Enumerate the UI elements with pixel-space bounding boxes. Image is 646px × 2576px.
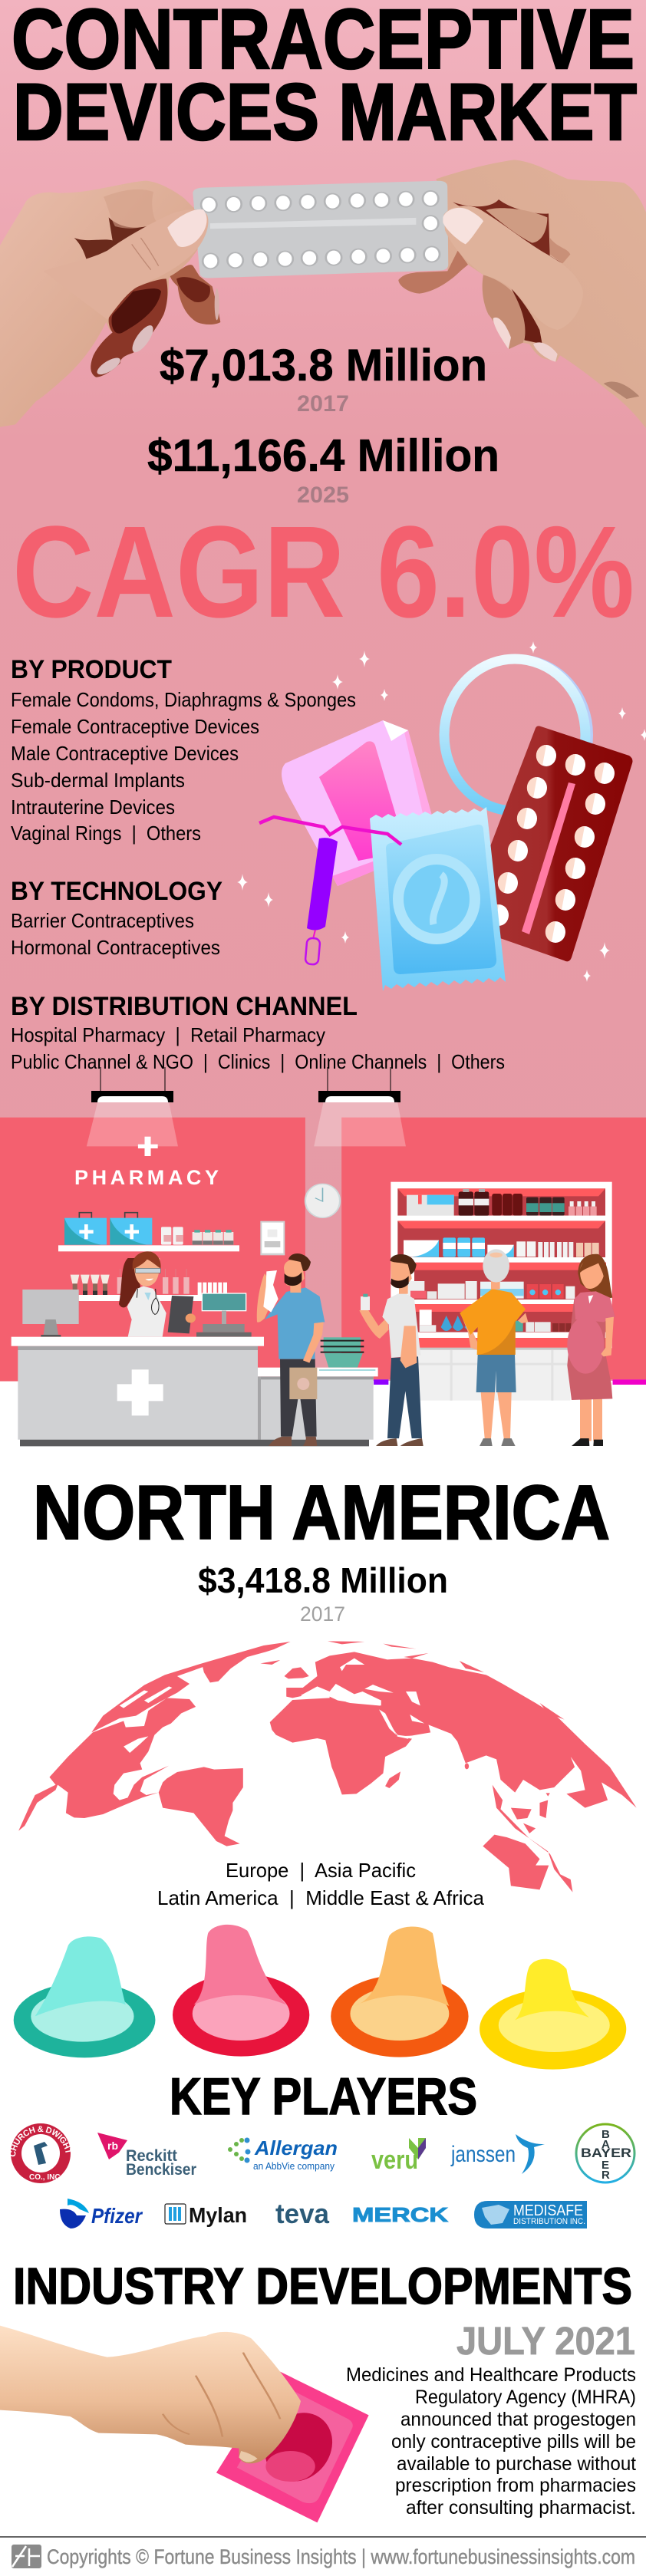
second shelf products	[404, 1237, 599, 1257]
southeast asia islands	[493, 1785, 572, 1892]
logo: bayer	[576, 2124, 634, 2182]
pharmacy left side	[12, 1213, 378, 1446]
customer with bottle	[359, 1254, 424, 1446]
market value 2017: $7,013.8 Million	[160, 341, 487, 390]
sparkles	[237, 641, 646, 982]
third shelf products	[408, 1281, 575, 1299]
pregnant customer	[567, 1254, 615, 1446]
segment: by technology: Barrier Contraceptives	[11, 909, 194, 932]
eurasia	[286, 1652, 637, 1808]
main counter	[12, 1337, 369, 1446]
market value 2017: 2017	[297, 391, 349, 417]
segment: by product	[11, 655, 356, 845]
segment: by technology: BY TECHNOLOGY	[11, 877, 222, 906]
shelf frame	[391, 1182, 612, 1348]
medicine shelving unit	[391, 1182, 612, 1401]
basket stack	[321, 1337, 364, 1368]
logo: bayer: BAYER	[581, 2146, 631, 2160]
development description: prescription from pharmacies	[395, 2475, 636, 2496]
wall shelf with first-aid kits	[58, 1213, 239, 1251]
hand	[0, 2326, 301, 2463]
logo: janssen	[450, 2134, 545, 2174]
illustration: hand holding condom packet	[0, 2326, 369, 2522]
logo: church and dwight: CHURCH & DWIGHT	[11, 2126, 71, 2157]
logo: reckitt benckiser: Reckitt	[126, 2147, 177, 2165]
pharmacy customers right side	[359, 1249, 615, 1446]
logo: mylan: Mylan	[189, 2203, 247, 2227]
north america value: $3,418.8 Million	[198, 1560, 448, 1600]
logo: medisafe	[474, 2201, 587, 2228]
right thumb over pack	[443, 206, 583, 330]
pink box	[282, 720, 439, 886]
computer monitor	[22, 1290, 79, 1337]
wall clock	[305, 1184, 340, 1217]
blister strip	[460, 726, 632, 961]
yellow condom	[480, 1959, 626, 2070]
logo: pfizer: Pfizer	[91, 2204, 143, 2228]
north america value: 2017	[300, 1603, 345, 1626]
market value 2025	[147, 430, 499, 508]
illustration: contraceptive products	[237, 641, 646, 991]
south america	[159, 1767, 243, 1846]
cash register	[196, 1293, 252, 1337]
sri lanka	[465, 1763, 469, 1769]
segment: by distribution channel	[11, 992, 505, 1073]
segment: by product: Male Contraceptive Devices	[11, 742, 239, 765]
development description: after consulting pharmacist.	[406, 2497, 636, 2518]
logo: teva: teva	[275, 2198, 330, 2229]
condom packet	[216, 2372, 369, 2522]
photo: coloured condoms	[14, 1925, 626, 2070]
logo: reckitt benckiser	[97, 2133, 196, 2179]
pharmacy sign text: PHARMACY	[74, 1166, 219, 1189]
wall poster	[260, 1221, 285, 1255]
logo: church and dwight	[11, 2123, 71, 2183]
development description: available to purchase without	[397, 2453, 636, 2475]
north america landmass	[9, 1698, 196, 1868]
segment: by distribution channel: BY DISTRIBUTION CHANNEL	[11, 992, 358, 1021]
footer rule	[0, 2536, 646, 2538]
logo: merck: MERCK	[352, 2203, 448, 2226]
africa	[270, 1698, 412, 1794]
light beams	[87, 1102, 406, 1146]
logo: janssen: janssen	[450, 2142, 516, 2167]
world map	[9, 1641, 637, 1892]
pharmacy sign	[138, 1137, 158, 1156]
other regions: Latin America | Middle East & Africa	[157, 1886, 485, 1909]
australia	[483, 1835, 549, 1889]
logo: bayer: A	[602, 2138, 610, 2151]
market value 2017	[160, 341, 487, 417]
title	[12, 0, 637, 157]
segment: by product: BY PRODUCT	[11, 655, 172, 684]
logo: reckitt benckiser: Benckiser	[126, 2161, 196, 2179]
greenland	[202, 1642, 291, 1682]
segment: by technology: Hormonal Contraceptives	[11, 936, 220, 959]
uk and iceland	[260, 1660, 309, 1678]
lower cabinet	[417, 1348, 570, 1401]
ceiling lamps	[91, 1067, 400, 1102]
other regions: Europe | Asia Pacific	[226, 1859, 416, 1882]
footer logo	[12, 2545, 41, 2568]
logo: bayer: E	[602, 2159, 609, 2172]
development description: Medicines and Healthcare Products	[346, 2364, 636, 2386]
segment: by distribution channel: Hospital Pharmacy | Retail Pharmacy	[11, 1023, 325, 1046]
side counter	[257, 1368, 378, 1440]
vaginal ring	[444, 658, 589, 812]
segment: by product: Sub-dermal Implants	[11, 769, 185, 792]
madagascar	[385, 1771, 400, 1788]
logo: mylan	[165, 2203, 247, 2227]
other regions	[157, 1859, 485, 1909]
background: pink top area	[0, 0, 646, 1381]
left hand behind pack	[0, 181, 220, 427]
segment: by product: Female Contraceptive Devices	[11, 715, 259, 738]
IUD device	[259, 817, 401, 965]
pharmacy room	[0, 1102, 646, 1473]
arctic and pacific islands	[328, 1641, 565, 1720]
segment: by distribution channel: Public Channel & NGO | Clinics | Online Channels | Others	[11, 1050, 505, 1073]
arctic archipelago	[91, 1663, 206, 1732]
elderly customer	[460, 1249, 528, 1446]
lower wall shelf with tubes and syringes	[71, 1269, 227, 1301]
logo: allergan: Allergan	[254, 2136, 338, 2159]
pharmacist	[119, 1251, 196, 1337]
customer with prescription	[257, 1253, 325, 1446]
pharmacy walls	[0, 1118, 646, 1473]
pill blister pack	[193, 181, 448, 278]
segment: by technology	[11, 877, 222, 959]
development date: JULY 2021	[456, 2319, 635, 2363]
fourth shelf products	[420, 1309, 572, 1332]
development description: announced that progestogen	[400, 2409, 636, 2430]
segment: by product: Intrauterine Devices	[11, 796, 175, 819]
logo: pfizer	[60, 2199, 143, 2228]
development description: only contraceptive pills will be	[391, 2431, 636, 2452]
shelf boards	[397, 1216, 606, 1338]
logo: church and dwight: CO., INC.	[29, 2173, 63, 2182]
logo: allergan: an AbbVie company	[253, 2160, 335, 2172]
market value 2025: 2025	[297, 483, 349, 508]
logo: reckitt benckiser: rb	[107, 2140, 118, 2152]
segment: by product: Vaginal Rings | Others	[11, 822, 201, 845]
logo: bayer: B	[602, 2128, 610, 2141]
left thumb over pack	[44, 209, 208, 320]
hero photo: hands holding pill pack	[0, 160, 646, 430]
teal condom	[14, 1936, 155, 2057]
logo: medisafe: DISTRIBUTION INC.	[513, 2217, 585, 2226]
segment: by product: Female Condoms, Diaphragms & Sponges	[11, 688, 356, 711]
logo: allergan	[228, 2136, 338, 2172]
north america value	[198, 1560, 448, 1626]
right hand behind pack	[398, 160, 646, 430]
water overlays	[120, 1659, 424, 1753]
orange condom	[331, 1927, 469, 2057]
top shelf products	[407, 1189, 597, 1216]
market value 2025: $11,166.4 Million	[147, 430, 499, 481]
blue condom packet	[370, 807, 506, 991]
red condom	[173, 1925, 309, 2057]
logo: bayer: R	[602, 2169, 610, 2182]
heading: key players: KEY PLAYERS	[170, 2067, 477, 2126]
logo: medisafe: MEDISAFE	[513, 2202, 583, 2219]
logo: veru: veru	[371, 2146, 418, 2175]
development description	[346, 2364, 636, 2518]
development description: Regulatory Agency (MHRA)	[415, 2387, 636, 2408]
background: white lower area	[0, 1381, 646, 2576]
